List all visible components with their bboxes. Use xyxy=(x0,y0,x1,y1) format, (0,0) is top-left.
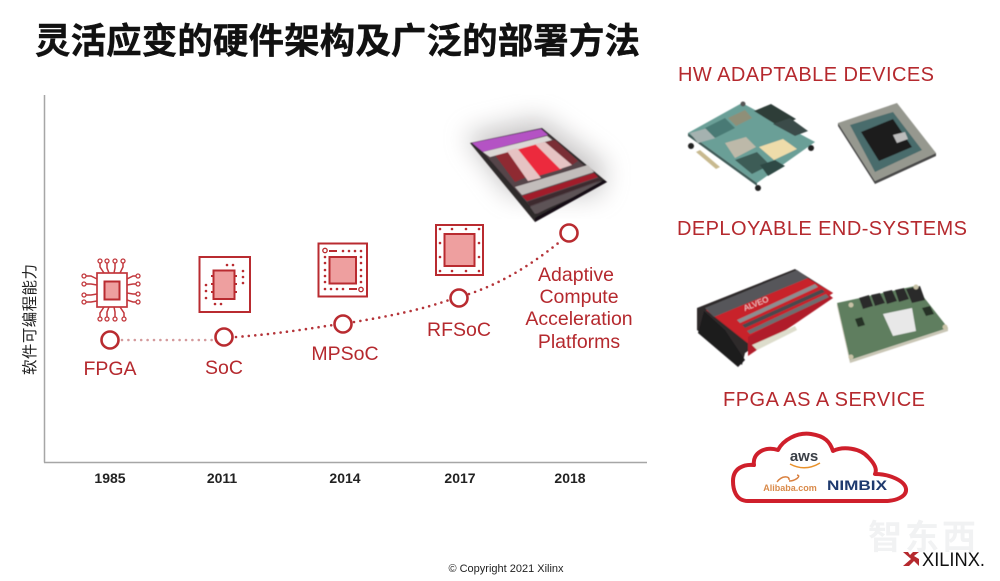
logo: aws: aws xyxy=(790,448,818,465)
image: packaged device xyxy=(838,103,936,184)
icon: MPSoC chip xyxy=(318,244,367,296)
image: Alveo accelerator card xyxy=(697,269,833,367)
node labels: Platforms xyxy=(538,331,620,353)
year labels: 2018 xyxy=(554,470,586,486)
logo: Xilinx: XILINX. xyxy=(922,550,985,571)
year labels: 2017 xyxy=(444,470,476,486)
node labels: Compute xyxy=(539,286,619,308)
dotted growth curve xyxy=(62,240,562,340)
heading: HW adaptable devices: HW ADAPTABLE DEVICES xyxy=(678,64,934,86)
timeline node: RFSoC xyxy=(450,290,468,306)
node labels: SoC xyxy=(205,357,243,379)
node labels xyxy=(83,264,633,380)
icon: SoC chip xyxy=(200,257,250,312)
title: 灵活应变的硬件架构及广泛的部署方法 xyxy=(35,21,640,61)
image: Alveo accelerator card: ALVEO xyxy=(742,295,770,313)
node labels: Adaptive xyxy=(538,264,614,286)
heading: deployable end-systems: DEPLOYABLE END-SYSTEMS xyxy=(677,218,967,240)
node labels: FPGA xyxy=(83,358,137,380)
timeline node: MPSoC xyxy=(334,316,352,332)
timeline node: SoC xyxy=(216,328,232,346)
copyright: © Copyright 2021 Xilinx xyxy=(448,563,564,575)
node labels: RFSoC xyxy=(427,319,491,341)
logo: Alibaba: Alibaba.com xyxy=(763,483,817,493)
year labels: 2014 xyxy=(329,470,361,486)
icon: RFSoC chip xyxy=(436,225,483,275)
x axis xyxy=(44,462,647,464)
image: FPGA development board xyxy=(688,102,815,191)
timeline node: ACAP xyxy=(560,224,578,242)
image: system-on-module board xyxy=(837,284,948,363)
logo: Nimbix: NIMBIX xyxy=(827,477,888,493)
timeline node: FPGA xyxy=(102,332,118,348)
icon: cloud with providers xyxy=(733,434,906,501)
heading: FPGA as a service: FPGA AS A SERVICE xyxy=(723,389,925,411)
year labels: 1985 xyxy=(94,470,126,486)
y axis xyxy=(44,95,46,462)
watermark: 智东西 xyxy=(868,519,976,557)
icon: FPGA chip xyxy=(82,259,140,321)
y axis label: 软件可编程能力 xyxy=(21,264,39,375)
node labels: Acceleration xyxy=(525,308,633,330)
year labels: 2011 xyxy=(207,470,237,486)
image: adaptive compute chip xyxy=(465,118,607,222)
node labels: MPSoC xyxy=(311,343,379,365)
year labels xyxy=(94,470,586,486)
